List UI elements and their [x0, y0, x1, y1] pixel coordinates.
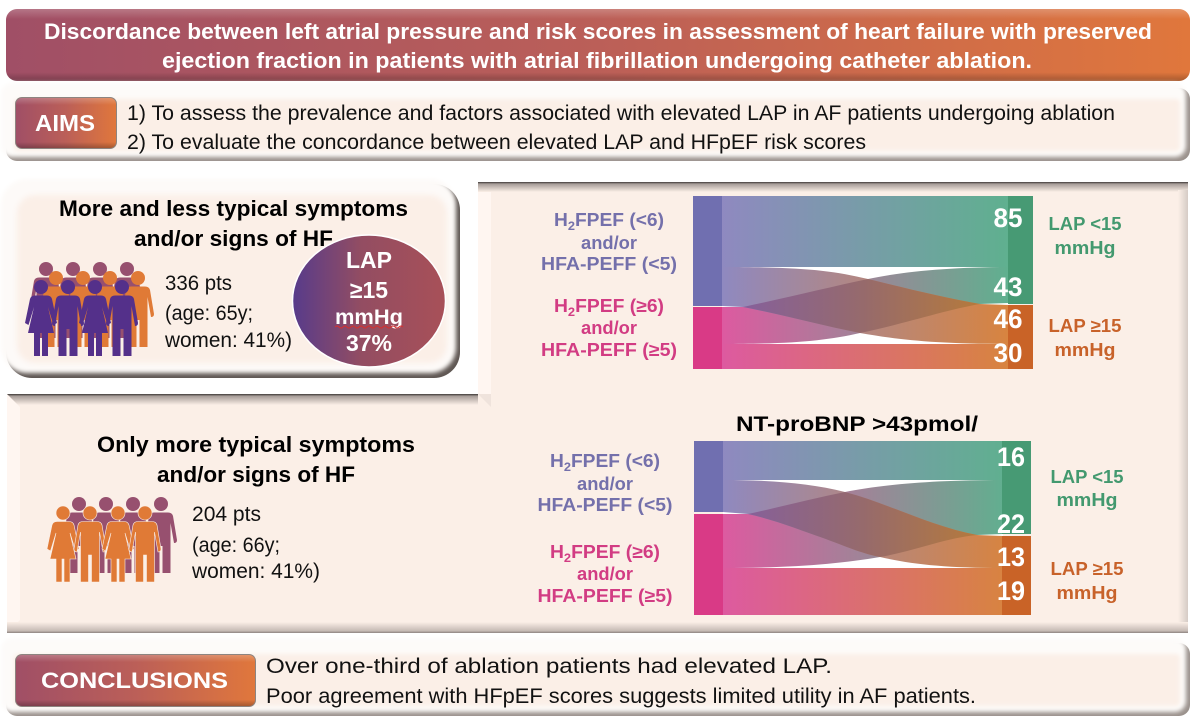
chart: sankey NT-proBNP — [538, 413, 1124, 615]
left label: low score — [541, 210, 677, 274]
right label: LAP below 15: LAP <15 — [1048, 214, 1122, 234]
chart title: NT-proBNP >43pmol/ — [736, 413, 978, 436]
values: 43 — [994, 272, 1022, 302]
panel: more and less typical symptoms — [1, 179, 460, 378]
right label: LAP below 15: mmHg — [1056, 490, 1118, 510]
values: 46 — [994, 304, 1022, 334]
patient stats: 336 pts — [165, 272, 232, 295]
right label: LAP below 15 — [1050, 467, 1124, 510]
flow: low score to LAP at or above 15 — [723, 480, 1003, 568]
values: 16 — [997, 442, 1025, 472]
aims text — [127, 101, 1115, 154]
patient stats: women: 41%) — [164, 329, 292, 352]
patient stats: women: 41%) — [191, 560, 320, 583]
callout: LAP oval: 37% — [346, 330, 392, 356]
aims text: 2) To evaluate the concordance between elevated LAP and HFpEF risk scores — [127, 130, 866, 154]
patient stats — [164, 272, 292, 352]
patient stats: 204 pts — [192, 503, 261, 526]
node: high score — [693, 307, 722, 369]
left label: low score: H — [550, 451, 563, 471]
node: low score — [694, 441, 723, 512]
right label: LAP at or above 15: LAP ≥15 — [1048, 316, 1122, 336]
left label: high score: HFA-PEFF (≥5) — [538, 586, 673, 606]
values: 30 — [994, 338, 1022, 368]
left label: low score: and/or — [581, 233, 637, 253]
aims text: 1) To assess the prevalence and factors associated with elevated LAP in AF patients undergoing ablation — [127, 101, 1115, 125]
left label: high score: and/or — [577, 564, 633, 584]
heading — [59, 196, 408, 251]
conclusions text — [266, 654, 976, 708]
title banner — [6, 9, 1190, 81]
node: LAP at or above 15 — [1008, 305, 1033, 369]
aims badge: AIMS — [35, 110, 95, 136]
node: LAP at or above 15 — [1002, 536, 1031, 615]
conclusions text: Over one-third of ablation patients had elevated LAP. — [266, 654, 832, 678]
left label: low score: and/or — [577, 474, 633, 494]
left label: high score: FPEF (≥6) — [571, 542, 660, 562]
patient stats: (age: 65y; — [165, 302, 253, 325]
callout: LAP oval — [292, 235, 446, 367]
callout: LAP oval: ≥15 — [350, 277, 388, 303]
left label: high score — [538, 542, 673, 606]
left label: low score — [538, 451, 672, 515]
values: 22 — [997, 509, 1025, 539]
left label: high score: FPEF (≥6) — [575, 296, 664, 316]
values: 13 — [997, 542, 1025, 572]
flow: high score to LAP below 15 — [722, 267, 1009, 344]
right label: LAP at or above 15 — [1050, 559, 1124, 603]
panel: only more typical symptoms — [47, 432, 415, 583]
patient stats — [191, 503, 320, 583]
icon: patient group — [47, 497, 177, 582]
node: LAP below 15 — [1008, 196, 1033, 304]
icon: patient group — [25, 262, 154, 356]
left label: low score: FPEF (<6) — [571, 451, 660, 471]
heading: and/or signs of HF — [157, 462, 355, 487]
left label: high score: HFA-PEFF (≥5) — [541, 340, 677, 360]
right label: LAP at or above 15: mmHg — [1056, 583, 1118, 603]
values — [994, 203, 1022, 368]
left label: high score: 2 — [568, 305, 575, 319]
right label: LAP at or above 15: LAP ≥15 — [1050, 559, 1124, 579]
values — [997, 442, 1025, 606]
left label: low score: HFA-PEFF (<5) — [541, 254, 677, 274]
right label: LAP at or above 15: mmHg — [1054, 340, 1116, 360]
flow: high score to LAP below 15 — [723, 480, 1003, 568]
left label: high score: 2 — [564, 551, 571, 565]
left label: low score: 2 — [564, 460, 571, 474]
heading: Only more typical symptoms — [97, 432, 415, 457]
heading: More and less typical symptoms — [59, 196, 408, 221]
patient stats: (age: 66y; — [192, 534, 280, 557]
node: LAP below 15 — [1002, 441, 1031, 534]
conclusions badge: CONCLUSIONS — [41, 668, 228, 693]
values: 19 — [997, 576, 1025, 606]
left label: low score: FPEF (<6) — [575, 210, 664, 230]
left label: high score: and/or — [581, 318, 637, 338]
flow: high score to LAP at or above 15 — [723, 568, 1003, 615]
callout: LAP oval: mmHg — [335, 306, 403, 329]
values: 85 — [994, 203, 1022, 233]
heading: and/or signs of HF — [134, 226, 333, 251]
right label: LAP below 15: mmHg — [1054, 238, 1116, 258]
left label: high score — [541, 296, 677, 360]
chart: sankey all patients — [541, 196, 1122, 369]
panel: main background — [7, 182, 1188, 633]
panel: aims — [1, 83, 1190, 161]
aims badge — [15, 97, 117, 149]
right label: LAP below 15: LAP <15 — [1050, 467, 1124, 487]
heading — [97, 432, 415, 487]
title banner: ejection fraction in patients with atrial fibrillation undergoing catheter ablation. — [162, 48, 1032, 73]
left label: low score: 2 — [568, 219, 575, 233]
flow: low score to LAP below 15 — [722, 196, 1009, 267]
left label: high score: H — [554, 296, 567, 316]
flow: low score to LAP at or above 15 — [722, 267, 1009, 344]
conclusions text: Poor agreement with HFpEF scores suggests limited utility in AF patients. — [266, 684, 976, 708]
flow: high score to LAP at or above 15 — [722, 344, 1009, 369]
flow overlap — [743, 279, 980, 333]
flow: low score to LAP below 15 — [723, 441, 1003, 480]
node: high score — [694, 514, 723, 615]
node: low score — [693, 196, 722, 306]
right label: LAP at or above 15 — [1048, 316, 1122, 360]
callout: LAP oval: LAP — [346, 247, 392, 273]
left label: low score: HFA-PEFF (<5) — [538, 495, 672, 515]
right label: LAP below 15 — [1048, 214, 1122, 258]
title banner: Discordance between left atrial pressure and risk scores in assessment of heart failure with preserved — [44, 19, 1152, 44]
panel: conclusions — [1, 638, 1190, 716]
flow overlap — [748, 492, 977, 557]
left label: low score: H — [554, 210, 567, 230]
left label: high score: H — [550, 542, 563, 562]
conclusions badge — [15, 654, 256, 707]
